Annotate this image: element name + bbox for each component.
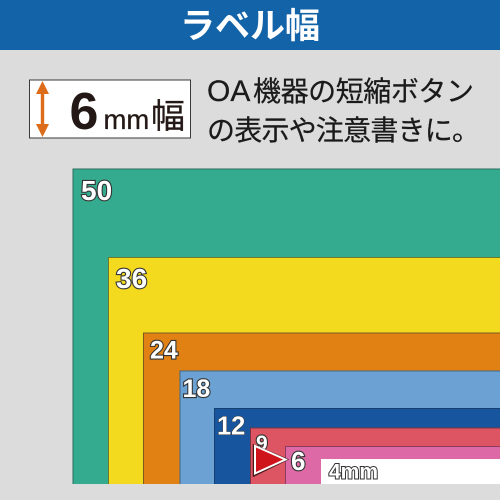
- bottom page margin: [0, 484, 500, 500]
- description text: OA: [207, 75, 250, 108]
- description text: [207, 75, 480, 146]
- panel: 18 mm: [180, 371, 500, 489]
- description text: 機器の短縮ボタン: [253, 76, 474, 107]
- panel: 18 mm: 18: [182, 375, 210, 403]
- nested label width chart: [73, 169, 500, 490]
- panel: 12 mm: [214, 408, 500, 488]
- header band with title: [0, 0, 500, 50]
- description text: の表示や注意書きに。: [207, 115, 480, 146]
- panel: 9 mm: 9: [256, 432, 268, 455]
- panel: 9 mm: [250, 428, 500, 489]
- badge label: 6: [70, 83, 98, 141]
- panel: 24 mm: [144, 333, 500, 489]
- panel: 6 mm: [286, 446, 500, 488]
- panel: 50 mm: 50: [81, 175, 112, 206]
- panel: 12 mm: 12: [217, 412, 245, 440]
- panel: 36 mm: 36: [116, 263, 147, 294]
- panel: 6 mm: 6: [291, 446, 305, 476]
- panel: 24 mm: 24: [150, 336, 178, 364]
- panel: 4 mm: 4mm: [329, 460, 378, 484]
- header band with title: ラベル幅: [180, 7, 320, 46]
- badge label: 幅: [151, 98, 185, 136]
- icon: red pointer triangle: [254, 446, 286, 474]
- icon: orange double arrow: [36, 81, 49, 137]
- badge label: mm: [104, 104, 149, 135]
- badge: 6 mm width: [30, 80, 190, 141]
- panel: 4 mm: [321, 459, 500, 489]
